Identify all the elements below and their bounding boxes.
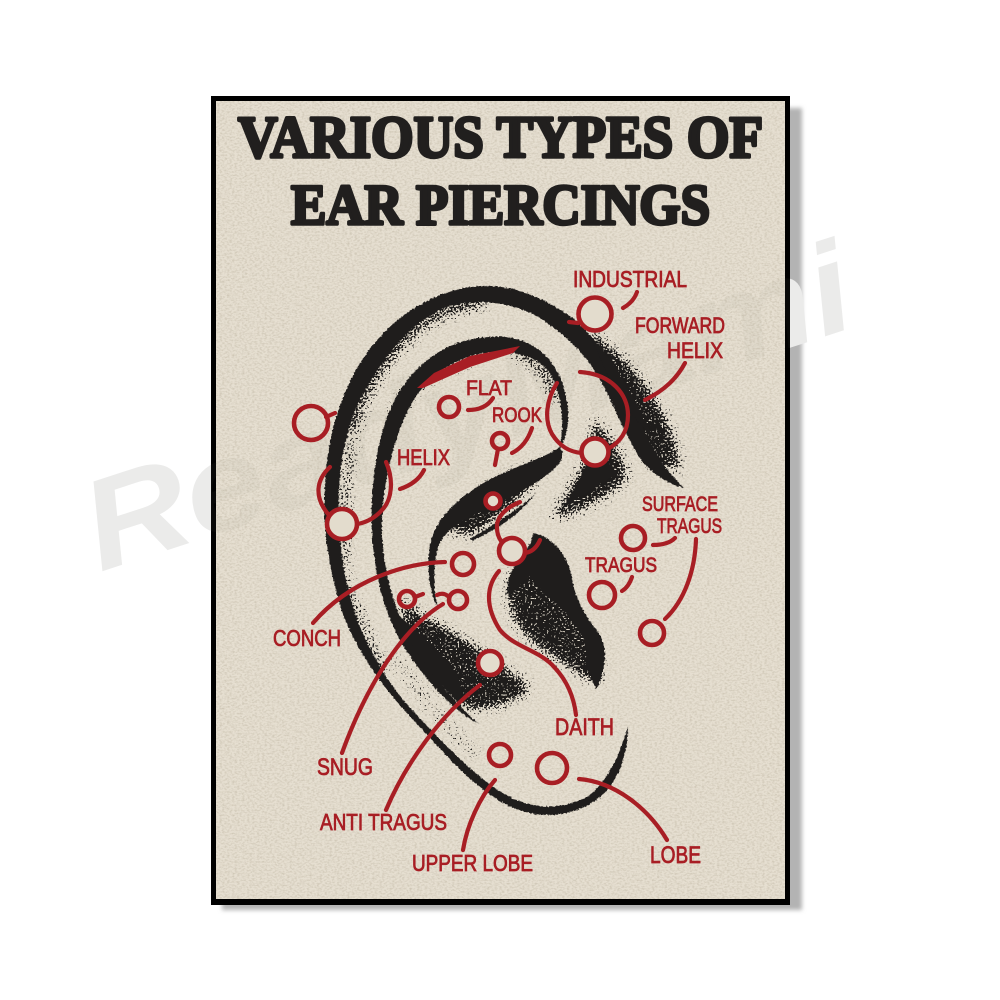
piercing: flat <box>439 397 493 417</box>
flat red bar <box>417 346 520 388</box>
poster paper <box>216 101 785 899</box>
label: forward helix <box>635 313 725 363</box>
piercing: lobe <box>537 753 667 840</box>
label: forward helix: FORWARD <box>635 313 725 338</box>
title: VARIOUS TYPES OF <box>238 104 763 170</box>
label: tragus: TRAGUS <box>585 554 657 577</box>
poster frame <box>211 96 790 905</box>
piercing: helix hoop <box>318 462 424 539</box>
watermark on white background: ReadyMami <box>64 215 872 599</box>
piercing: conch <box>313 553 474 623</box>
upper right shadow spine <box>590 335 652 434</box>
label: daith: DAITH <box>555 714 614 741</box>
label: industrial: INDUSTRIAL <box>573 266 687 292</box>
label: surface tragus <box>642 493 722 538</box>
label: upper lobe: UPPER LOBE <box>412 850 533 876</box>
label: forward helix: HELIX <box>667 338 723 363</box>
piercing: upper lobe <box>463 744 511 850</box>
watermark on poster: ReadyMami <box>64 215 872 599</box>
tragus blob <box>508 533 605 689</box>
piercing: helix upper ring <box>294 406 335 440</box>
label: lobe: LOBE <box>650 842 701 869</box>
piercing: surface tragus <box>621 526 696 645</box>
S fold lower edge <box>470 494 535 541</box>
antihelix shadow wedge <box>395 612 461 704</box>
lower right crescent core <box>562 448 617 508</box>
label: rook: ROOK <box>492 404 542 427</box>
poster shadow <box>222 108 802 910</box>
outer helix rim <box>324 286 684 815</box>
piercing: industrial <box>569 292 637 330</box>
S curve fold <box>428 447 563 608</box>
piercing: forward helix hoop <box>547 363 685 466</box>
stippled shading <box>340 302 680 755</box>
label: conch: CONCH <box>273 625 341 651</box>
solid ink strokes <box>324 286 684 815</box>
label: helix: HELIX <box>397 445 450 470</box>
piercing: rook <box>492 428 532 465</box>
inner antihelix fold <box>372 337 568 724</box>
piercing: tragus <box>589 577 632 608</box>
title <box>238 104 763 237</box>
piercing: snug <box>342 591 467 753</box>
label: surface tragus: SURFACE <box>642 493 718 516</box>
label: snug: SNUG <box>317 754 373 781</box>
piercing: daith small ring and hoop <box>486 494 540 564</box>
ear illustration <box>324 286 684 815</box>
label: anti tragus: ANTI TRAGUS <box>320 809 447 835</box>
title: EAR PIERCINGS <box>291 174 710 237</box>
label: flat: FLAT <box>466 377 512 400</box>
piercing: anti tragus <box>386 651 502 810</box>
piercing: daith line <box>489 571 576 715</box>
label: surface tragus: TRAGUS <box>657 515 722 538</box>
